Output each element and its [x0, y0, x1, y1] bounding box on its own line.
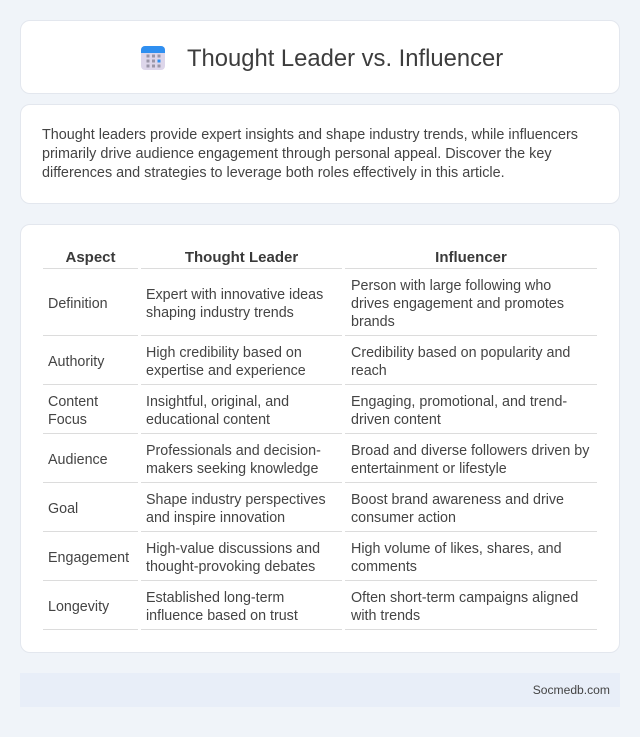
comparison table: comments [351, 559, 417, 575]
comparison table: High-value discussions and [146, 541, 320, 557]
comparison table: expertise and experience [146, 363, 306, 379]
comparison table: Credibility based on popularity and [351, 345, 570, 361]
comparison table: Definition [48, 296, 108, 312]
comparison table: Insightful, original, and [146, 394, 289, 410]
comparison table: brands [351, 314, 395, 330]
panel: comparison table card [20, 224, 620, 653]
title: Thought Leader vs. Influencer [187, 45, 503, 72]
text block: introduction: Thought leaders provide expert insights and shape industry trends, while influencers [42, 127, 578, 143]
comparison table: Goal [48, 501, 78, 517]
comparison table: consumer action [351, 510, 456, 526]
comparison table: Audience [48, 452, 108, 468]
comparison table: Thought Leader [185, 249, 298, 266]
comparison table: reach [351, 363, 387, 379]
comparison table: Aspect [65, 249, 116, 266]
text block: introduction: primarily drive audience engagement through personal appeal. Discover the key [42, 146, 552, 162]
comparison table: Professionals and decision- [146, 443, 321, 459]
comparison table: Boost brand awareness and drive [351, 492, 564, 508]
text block: introduction [42, 127, 578, 181]
comparison table: and inspire innovation [146, 510, 285, 526]
footer source text: Socmedb.com [533, 683, 610, 697]
comparison table: driven content [351, 412, 441, 428]
comparison table: High volume of likes, shares, and [351, 541, 562, 557]
comparison table: thought-provoking debates [146, 559, 315, 575]
comparison table: drives engagement and promotes [351, 296, 564, 312]
comparison table: Influencer [435, 249, 507, 266]
text block: introduction: differences and strategies to leverage both roles effectively in this article. [42, 165, 505, 181]
comparison table: Engaging, promotional, and trend- [351, 394, 567, 410]
comparison table: Person with large following who [351, 278, 551, 294]
comparison table: Shape industry perspectives [146, 492, 326, 508]
comparison table: Longevity [48, 599, 109, 615]
footer bar [20, 673, 620, 707]
comparison table: Broad and diverse followers driven by [351, 443, 589, 459]
comparison table: Expert with innovative ideas [146, 287, 323, 303]
comparison table [43, 249, 597, 630]
comparison table: with trends [351, 608, 420, 624]
comparison table: Content [48, 394, 98, 410]
comparison table: Engagement [48, 550, 129, 566]
comparison table: Established long-term [146, 590, 284, 606]
panel: header card [20, 20, 620, 94]
comparison table: High credibility based on [146, 345, 302, 361]
comparison table: influence based on trust [146, 608, 298, 624]
icon: calendar [141, 46, 165, 70]
comparison table: makers seeking knowledge [146, 461, 318, 477]
comparison table: shaping industry trends [146, 305, 294, 321]
comparison table: Focus [48, 412, 87, 428]
comparison table: entertainment or lifestyle [351, 461, 507, 477]
comparison table: educational content [146, 412, 270, 428]
comparison table: Often short-term campaigns aligned [351, 590, 578, 606]
panel: intro text card [20, 104, 620, 204]
comparison table: Authority [48, 354, 104, 370]
